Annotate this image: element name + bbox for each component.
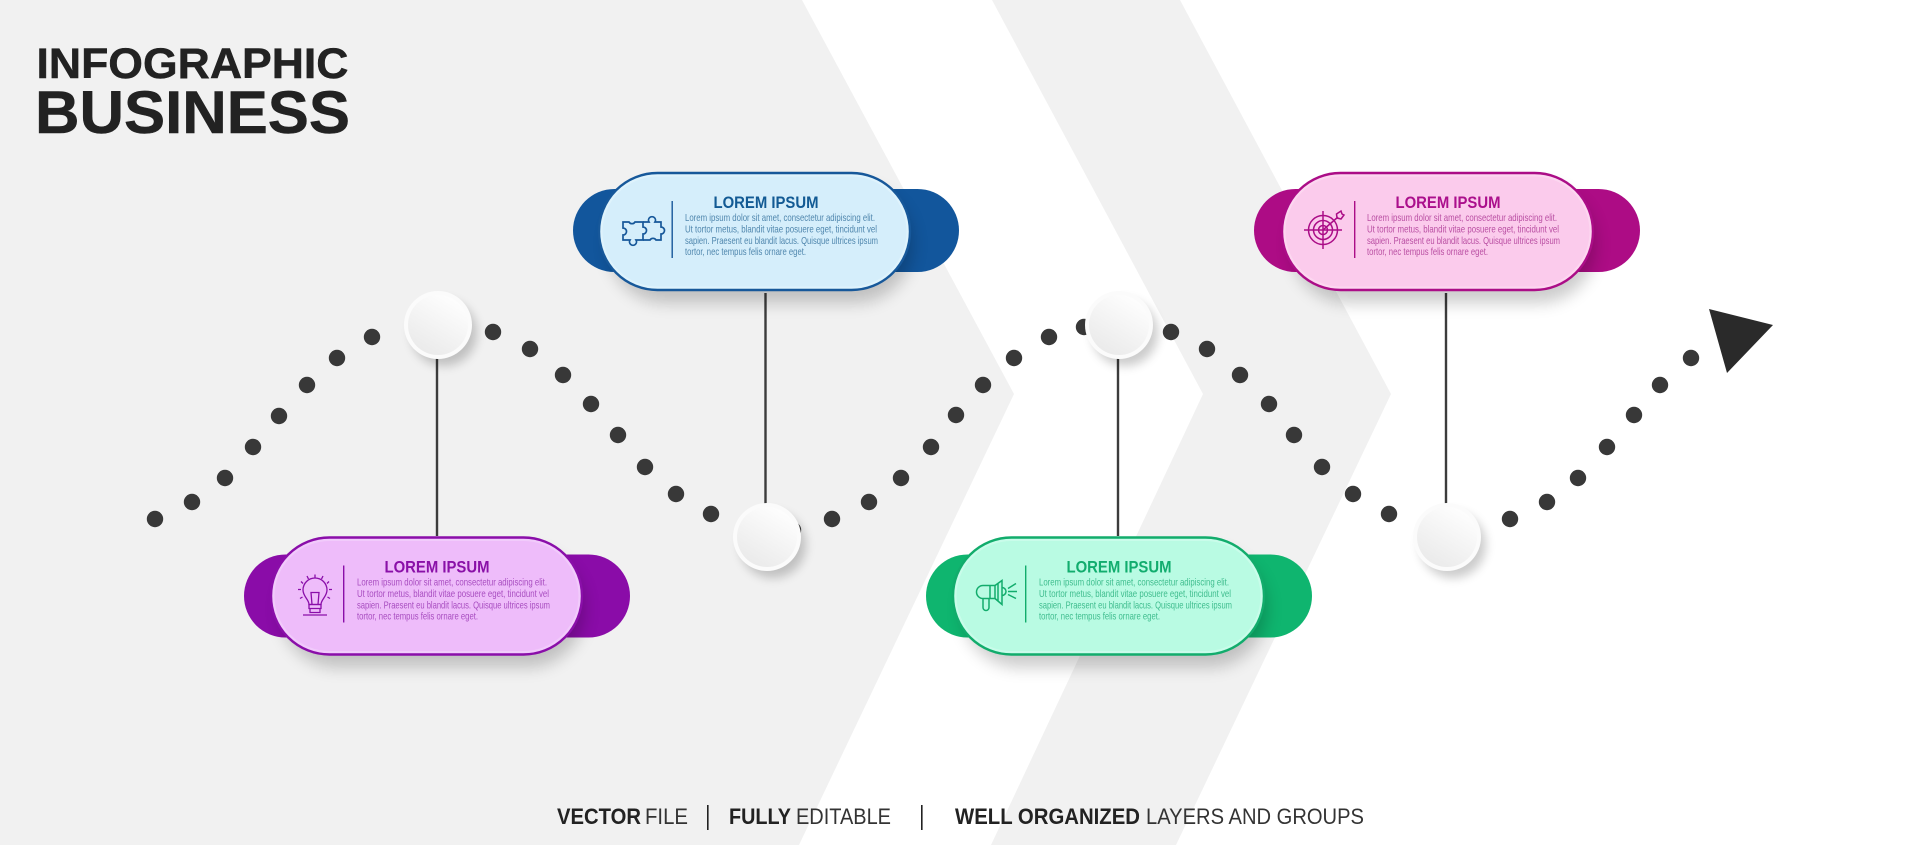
- footer tagline: FILE: [645, 804, 688, 829]
- divider and body text: [343, 566, 550, 622]
- node circle 3: [1085, 291, 1158, 366]
- icon: puzzle pieces: [623, 217, 664, 245]
- divider and body text: [1025, 566, 1232, 622]
- heading: LOREM IPSUM: [1396, 193, 1500, 212]
- dotted wave path: [147, 319, 1699, 538]
- title: BUSINESS: [35, 79, 350, 146]
- divider and body text: tortor, nec tempus felis ornare eget.: [685, 247, 806, 258]
- footer tagline: FULLY: [729, 804, 791, 829]
- footer tagline: EDITABLE: [796, 804, 891, 829]
- footer tagline: VECTOR: [557, 804, 641, 829]
- divider and body text: sapien. Praesent eu blandit lacus. Quisque ultrices ipsum: [1039, 600, 1232, 612]
- connector stems: [437, 293, 1446, 536]
- node circle 1: [404, 291, 477, 366]
- divider and body text: sapien. Praesent eu blandit lacus. Quisque ultrices ipsum: [357, 600, 550, 612]
- divider and body text: Lorem ipsum dolor sit amet, consectetur adipiscing elit.: [685, 213, 875, 224]
- footer tagline: LAYERS AND GROUPS: [1146, 804, 1364, 829]
- arrow head: [1709, 309, 1773, 373]
- title: [35, 40, 350, 146]
- divider and body text: Ut tortor metus, blandit vitae posuere eget, tincidunt vel: [1367, 224, 1559, 236]
- divider and body text: Ut tortor metus, blandit vitae posuere eget, tincidunt vel: [357, 589, 549, 600]
- divider and body text: sapien. Praesent eu blandit lacus. Quisque ultrices ipsum: [685, 236, 878, 247]
- divider and body text: Lorem ipsum dolor sit amet, consectetur adipiscing elit.: [1039, 578, 1229, 588]
- panel: purple card: [244, 538, 630, 668]
- heading: LOREM IPSUM: [1066, 558, 1172, 576]
- divider and body text: Lorem ipsum dolor sit amet, consectetur adipiscing elit.: [1367, 213, 1557, 224]
- icon: megaphone: [976, 580, 1017, 610]
- divider and body text: tortor, nec tempus felis ornare eget.: [1039, 612, 1160, 622]
- heading: LOREM IPSUM: [714, 193, 818, 212]
- icon: target: [1304, 211, 1344, 249]
- heading: LOREM IPSUM: [384, 558, 490, 576]
- divider and body text: Ut tortor metus, blandit vitae posuere eget, tincidunt vel: [1039, 589, 1231, 600]
- title: INFOGRAPHIC: [36, 40, 348, 88]
- footer tagline: [557, 804, 1364, 830]
- footer tagline: WELL ORGANIZED: [955, 804, 1140, 829]
- divider and body text: tortor, nec tempus felis ornare eget.: [1367, 247, 1488, 258]
- divider and body text: [672, 201, 878, 258]
- panel: pink card: [1254, 173, 1640, 303]
- icon: light bulb: [298, 574, 332, 615]
- divider and body text: [1354, 201, 1560, 258]
- divider and body text: Lorem ipsum dolor sit amet, consectetur adipiscing elit.: [357, 578, 547, 588]
- panel: blue card: [573, 173, 959, 303]
- node circle 4: [1413, 503, 1486, 578]
- panel: green card: [926, 538, 1312, 668]
- divider and body text: Ut tortor metus, blandit vitae posuere eget, tincidunt vel: [685, 224, 877, 236]
- node circle 2: [733, 503, 806, 578]
- divider and body text: tortor, nec tempus felis ornare eget.: [357, 612, 478, 622]
- divider and body text: sapien. Praesent eu blandit lacus. Quisque ultrices ipsum: [1367, 236, 1560, 247]
